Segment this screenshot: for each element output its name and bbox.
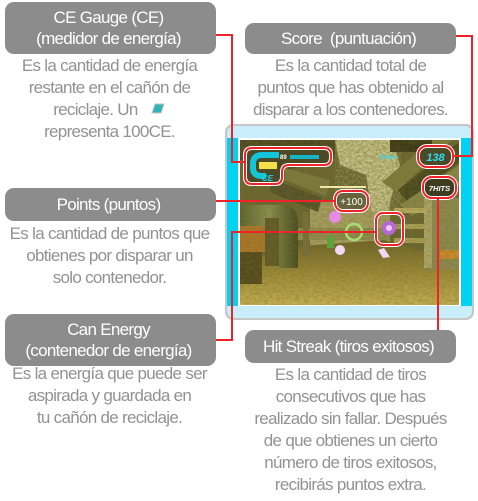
text: CE Gauge description: representa 100CE. — [44, 122, 175, 141]
text: CE Gauge description — [22, 56, 198, 141]
text: Hit Streak description: consecutivos que has — [276, 387, 425, 406]
text: Can Energy description: tu cañón de reciclaje. — [37, 408, 182, 427]
text: Points description: Es la cantidad de puntos que — [10, 224, 209, 243]
text: CE Gauge description: restante en el cañón de — [29, 78, 190, 97]
hit streak HUD — [423, 177, 456, 198]
heading: CE Gauge — [5, 2, 216, 54]
targets — [329, 211, 341, 223]
right pillar and rungs — [425, 198, 459, 270]
text: Points description — [10, 224, 210, 287]
text: Points description: obtienes por disparar un — [26, 246, 193, 265]
heading: Can Energy: (contenedor de energía) — [25, 341, 192, 360]
score HUD — [380, 146, 453, 167]
leader line: CE gauge — [216, 35, 245, 162]
text: Hit Streak description: número de tiros exitosos, — [264, 453, 437, 472]
score HUD: Score — [380, 155, 397, 161]
CE gauge HUD: 89 — [280, 155, 287, 161]
points HUD: +100 — [340, 197, 363, 208]
heading: Hit Streak: Hit Streak (tiros exitosos) — [263, 337, 434, 356]
score HUD: 138 — [426, 152, 446, 164]
text: Score description — [253, 56, 448, 119]
upper pipes — [240, 140, 335, 170]
text: Score description: disparar a los contenedores. — [253, 100, 448, 119]
CE gauge HUD — [245, 148, 331, 184]
text: Hit Streak description — [254, 365, 447, 494]
text: Hit Streak description: recibirás puntos extra. — [275, 475, 426, 494]
heading: Hit Streak — [245, 330, 456, 363]
leader line: can energy — [216, 232, 376, 340]
text: Score description: Es la cantidad total de — [275, 56, 426, 75]
heading: CE Gauge: (medidor de energía) — [36, 29, 181, 48]
heading: Can Energy — [5, 314, 216, 366]
text: Hit Streak description: Es la cantidad de tiros — [275, 365, 426, 384]
leader line: hit streak — [437, 198, 439, 332]
game screenshot panel — [216, 34, 474, 341]
leader line: points — [216, 200, 335, 202]
heading: Points: Points (puntos) — [57, 195, 160, 214]
text: CE Gauge description: Es la cantidad de energía — [22, 56, 197, 75]
floor — [240, 240, 459, 305]
text: Can Energy description — [12, 364, 208, 427]
CE gauge HUD: CE — [262, 174, 274, 183]
text: Can Energy description: Es la energía que puede ser — [12, 364, 207, 383]
text: Hit Streak description: de que obtienes un cierto — [264, 431, 437, 450]
heading: Score: Score (puntuación) — [281, 29, 416, 48]
heading: Can Energy: Can Energy — [67, 320, 150, 339]
heading: Score — [245, 23, 456, 54]
frame — [225, 124, 474, 320]
background wall — [240, 140, 459, 256]
heading: Points — [5, 188, 216, 221]
heading: CE Gauge: CE Gauge (CE) — [54, 8, 163, 27]
points HUD — [335, 191, 368, 211]
hanging leaves — [335, 140, 400, 212]
left pipe and block — [240, 226, 265, 252]
hit streak HUD: 7HITS — [429, 184, 450, 193]
text: Hit Streak description: realizado sin fallar. Después — [254, 409, 447, 428]
can energy highlight — [376, 213, 403, 245]
text: Score description: puntos que has obtenido al — [258, 78, 443, 97]
text: Can Energy description: aspirada y guardada en — [28, 386, 191, 405]
text: Points description: solo contenedor. — [53, 268, 166, 287]
leader line: score — [453, 36, 472, 156]
text: CE Gauge description: reciclaje. Un — [53, 100, 138, 119]
